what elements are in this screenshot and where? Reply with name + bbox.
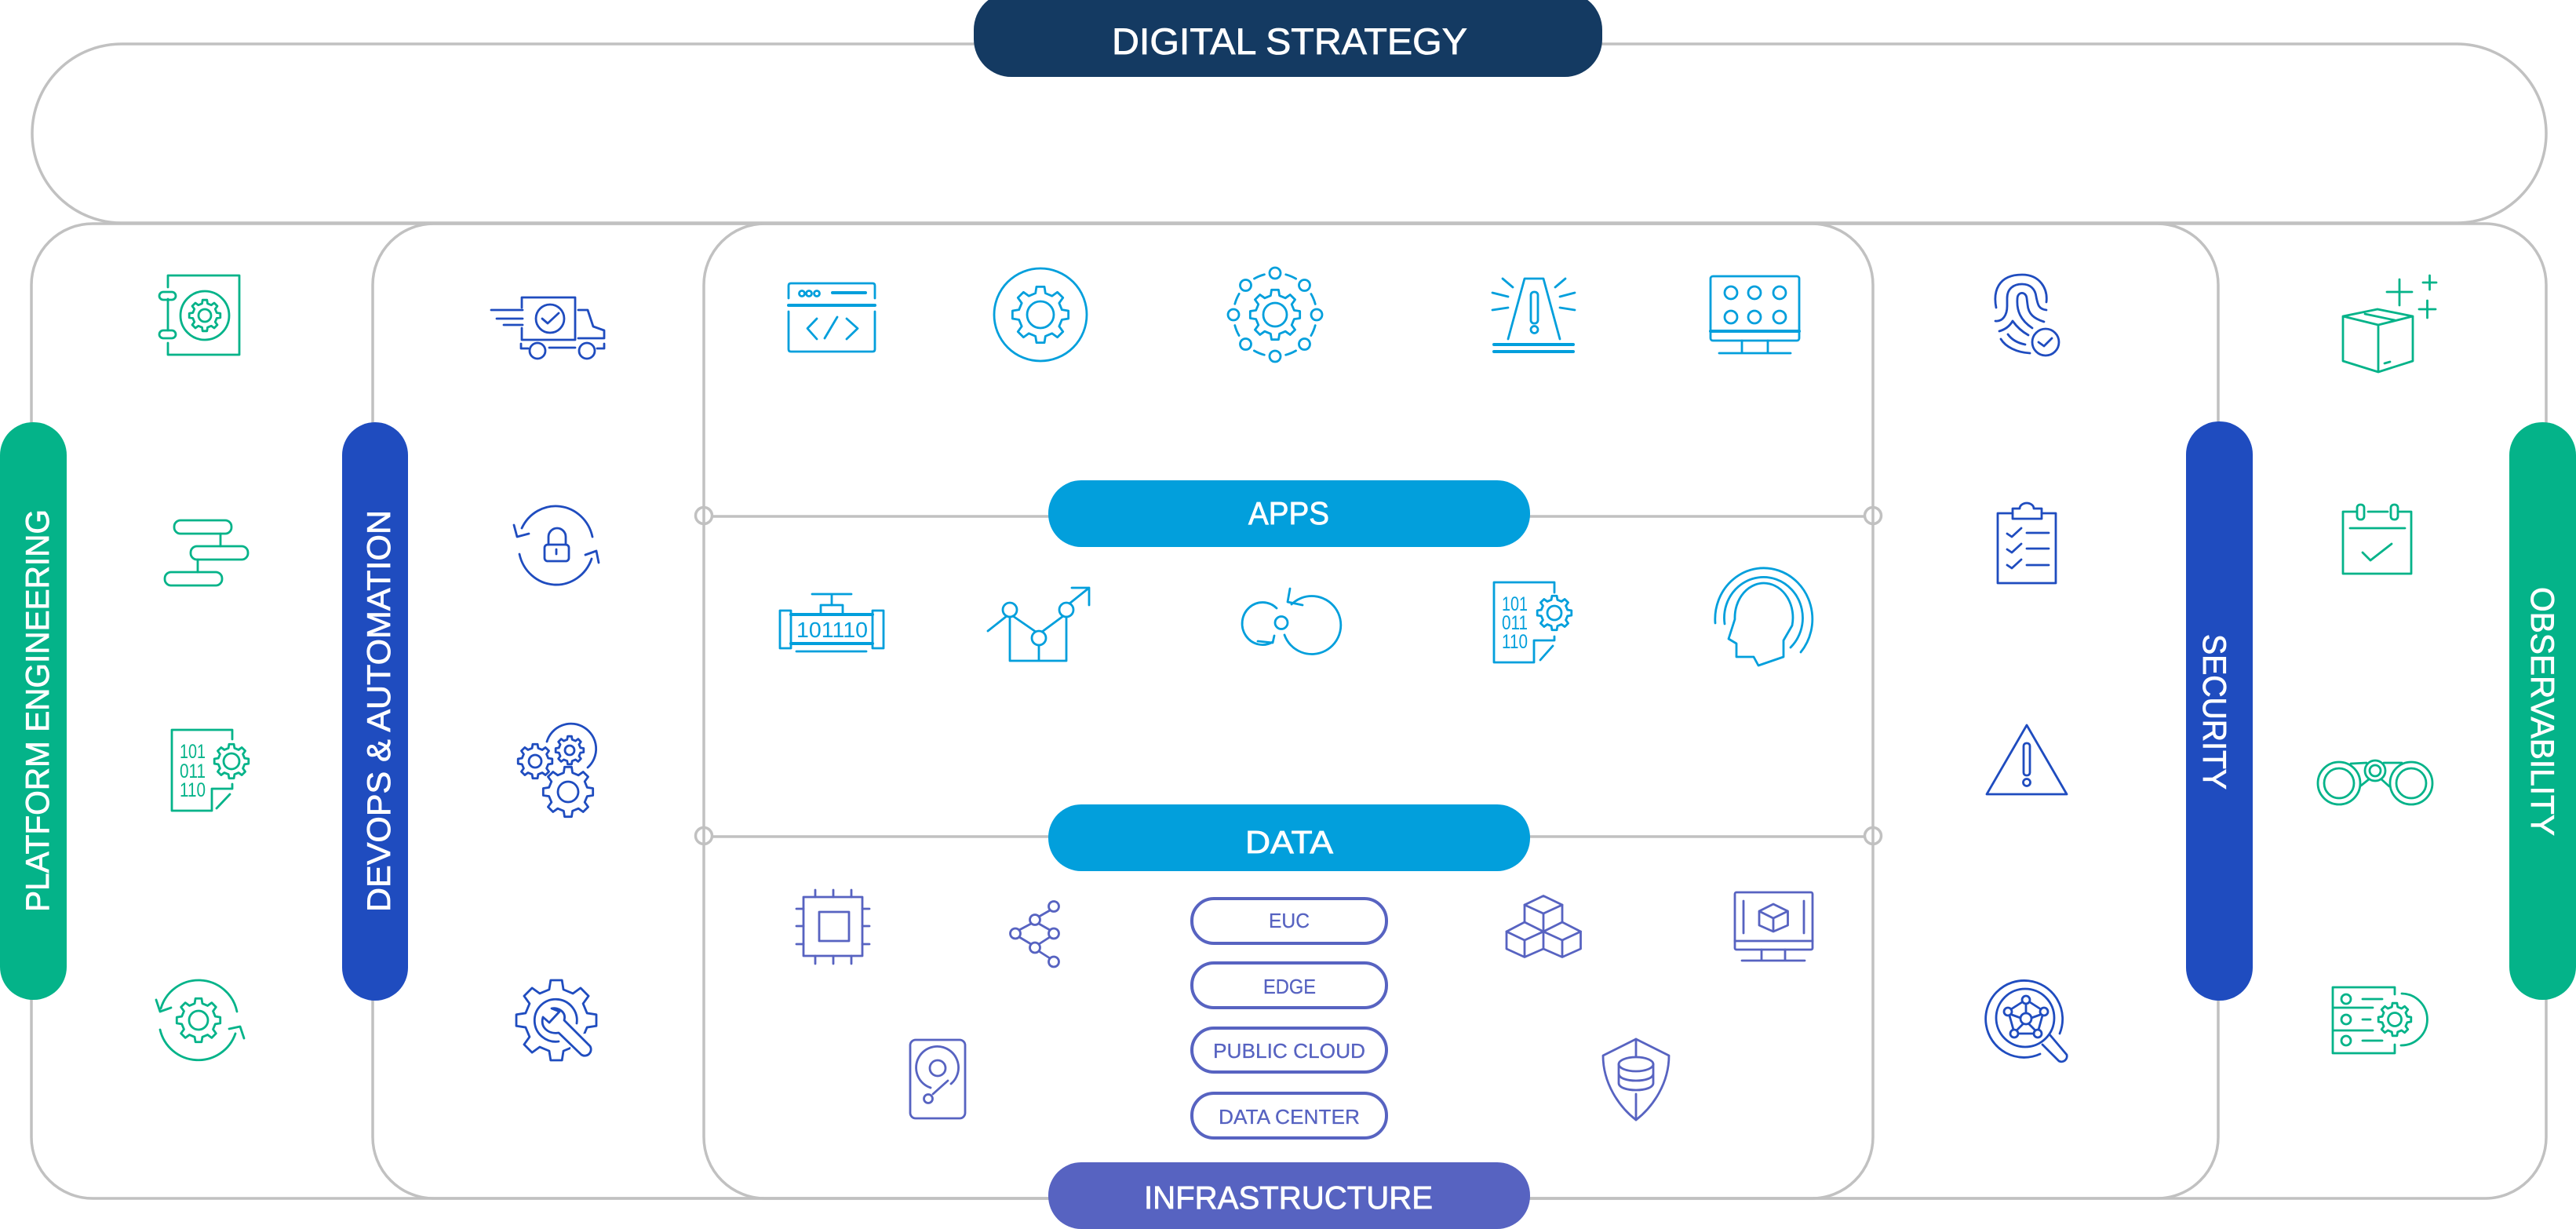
pill: data center	[1192, 1093, 1386, 1138]
icon: binary code with gear: 110	[180, 779, 206, 801]
heading: data: DATA	[1245, 824, 1334, 860]
panel: security	[1986, 275, 2253, 1062]
icon: processor chip	[796, 890, 869, 964]
icon: binary code with gear	[172, 730, 249, 811]
heading: observability: OBSERVABILITY	[2524, 587, 2561, 836]
heading: digital strategy: DIGITAL STRATEGY	[1112, 20, 1467, 62]
panel: platform engineering	[0, 275, 249, 1060]
heading: data	[1048, 804, 1530, 871]
icon: alert beacon	[1492, 279, 1575, 352]
heading: infrastructure	[1048, 1162, 1530, 1229]
icon: binary file with gear: 110	[1502, 631, 1528, 653]
icon: binary file with gear: 011	[1502, 612, 1528, 634]
icon: database shield	[1603, 1039, 1669, 1120]
panel: apps, data and infrastructure	[695, 224, 1882, 1229]
icon: gears	[518, 724, 596, 817]
icon: wrench in gear	[516, 980, 600, 1063]
heading: digital strategy	[974, 0, 1602, 77]
icon: network magnifier	[1986, 980, 2067, 1062]
icon: warning triangle	[1987, 725, 2067, 794]
icon: binary file with gear	[1494, 582, 1572, 662]
icon: calendar check	[2343, 505, 2411, 574]
icon: hard disk	[910, 1040, 965, 1118]
icon: monitor with cube	[1735, 892, 1813, 961]
pill: EDGE: EDGE	[1263, 975, 1316, 998]
pill: public cloud: PUBLIC CLOUD	[1213, 1039, 1365, 1063]
icon: node tree	[1011, 901, 1059, 967]
icon: binoculars	[2318, 760, 2432, 804]
icon: checklist clipboard	[1998, 503, 2056, 583]
icon: new package	[2343, 275, 2436, 372]
heading: apps	[1048, 480, 1530, 547]
heading: platform engineering	[0, 422, 67, 1000]
pill: EDGE	[1192, 963, 1386, 1008]
icon: gear cycle	[156, 980, 244, 1060]
icon: fingerprint check	[1995, 275, 2059, 356]
heading: devops and automation	[342, 422, 408, 1001]
icon: monitor dashboard	[1711, 276, 1799, 353]
heading: observability	[2509, 422, 2576, 1000]
panel: devops and security outline	[373, 224, 2218, 1198]
heading: platform engineering: PLATFORM ENGINEERING	[19, 509, 56, 912]
panel: devops and automation	[342, 297, 604, 1063]
panel: observability	[2318, 275, 2576, 1053]
panel: platform engineering and observability outline	[31, 224, 2546, 1198]
icon: circular sync	[1242, 589, 1341, 654]
heading: security: SECURITY	[2196, 634, 2233, 790]
icon: gear document	[159, 275, 239, 355]
heading: devops and automation: DEVOPS & AUTOMATION	[360, 510, 397, 912]
icon: server settings	[2333, 987, 2427, 1053]
icon: gear with orbit	[1228, 268, 1322, 362]
pill: data center: DATA CENTER	[1219, 1105, 1360, 1129]
icon: binary file with gear: 101	[1502, 593, 1528, 615]
icon: timeline bars	[165, 520, 248, 585]
icon: delivery truck	[491, 297, 604, 359]
pill: public cloud	[1192, 1028, 1386, 1072]
heading: security	[2186, 421, 2253, 1001]
panel: digital strategy	[32, 0, 2546, 223]
icon: AI head	[1715, 568, 1813, 666]
icon: binary code with gear: 011	[180, 760, 206, 782]
pill: EUC: EUC	[1269, 909, 1310, 932]
icon: lock cycle	[514, 506, 599, 585]
icon: binary code with gear: 101	[180, 741, 206, 763]
icon: data pipeline valve: 101110	[796, 618, 868, 642]
pill: EUC	[1192, 899, 1386, 943]
icon: gear in circle	[994, 268, 1087, 361]
heading: apps: APPS	[1248, 495, 1329, 531]
icon: data pipeline valve	[780, 594, 884, 651]
icon: growth chart	[988, 588, 1089, 661]
icon: code window	[789, 283, 875, 352]
heading: infrastructure: INFRASTRUCTURE	[1144, 1180, 1433, 1216]
icon: cubes	[1507, 896, 1580, 957]
